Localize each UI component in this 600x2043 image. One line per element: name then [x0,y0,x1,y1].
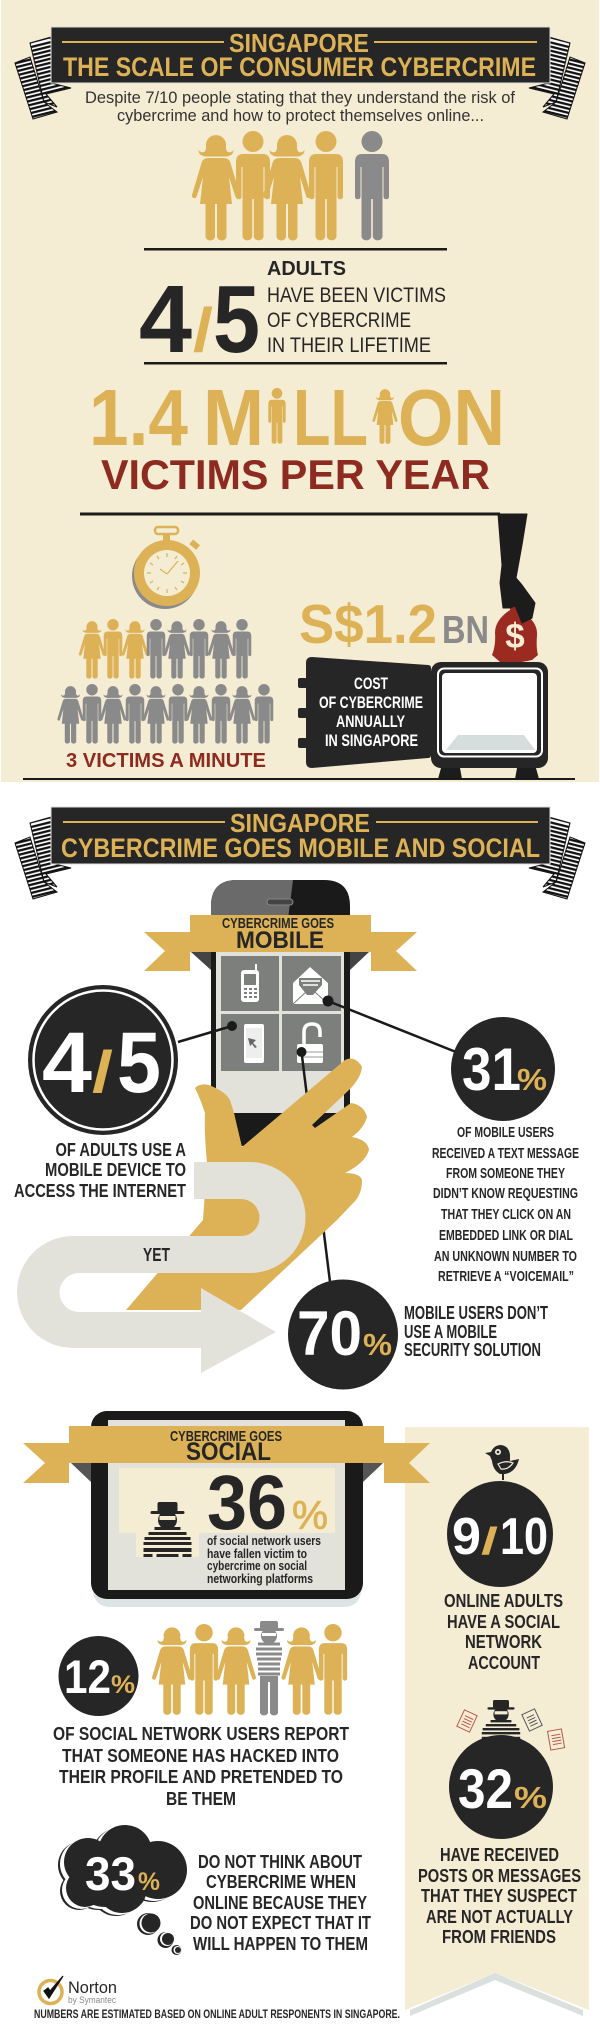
stat circle: 31% [451,1017,555,1121]
stat circle: 70% [288,1280,398,1390]
icon: man as letter I [268,388,286,444]
icon: open safe: ANNUALLY [336,713,405,731]
text: mobile users no security: USE A MOBILE [404,1322,497,1342]
illustration: smartphone [211,880,350,1146]
stat: 4/5 adults victims [139,258,446,373]
stat circle: 9/10: 9 [452,1508,481,1566]
banner: Singapore cybercrime goes mobile and social [15,807,585,899]
icon: open safe: OF CYBERCRIME [319,694,423,712]
stat circle: 32% [449,1735,553,1839]
ribbon: cybercrime goes mobile: CYBERCRIME GOES [222,915,334,932]
text: do not think about cybercrime [190,1852,371,1954]
footnote: NUMBERS ARE ESTIMATED BASED ON ONLINE ADULT RESPONENTS IN SINGAPORE. [34,2009,400,2021]
text: do not think about cybercrime: CYBERCRIME WHEN [206,1872,356,1892]
icon: money bag [492,596,538,663]
ribbon: cybercrime goes mobile: MOBILE [236,927,324,954]
stat circle: 32%: 32 [458,1757,513,1820]
icon: open padlock [297,1024,323,1063]
icon: touch tablet [244,1024,264,1063]
illustration: tablet with 36% stat [91,1411,363,1607]
stat: 4/5 adults victims: / [193,296,213,364]
ribbon: cybercrime goes social: CYBERCRIME GOES [170,1428,282,1445]
text: hacked profiles: OF SOCIAL NETWORK USERS REPORT [53,1724,349,1744]
text: adults use mobile device: MOBILE DEVICE TO [45,1160,186,1180]
panel: cybercrime goes mobile and social [14,807,589,2021]
text: adults use mobile device: ACCESS THE INTERNET [14,1181,186,1201]
stat circle: 9/10: / [481,1521,499,1563]
stat circle: 4/5: 4 [42,1015,92,1111]
text: mobile users text message [432,1125,579,1285]
stat: 4/5 adults victims: 5 [213,266,260,373]
text: adults use mobile device: OF ADULTS USE A [56,1140,186,1160]
people rows: 3 victims a minute [57,619,273,744]
arrow: yet: YET [143,1245,170,1265]
text: mobile users no security: SECURITY SOLUTION [404,1340,541,1360]
illustration: tablet with 36% stat: cybercrime on social [207,1558,307,1573]
illustration: tablet with 36% stat: have fallen victim to [207,1546,307,1561]
logo: Norton by Symantec [39,1976,117,2005]
stat: 4/5 adults victims: IN THEIR LIFETIME [267,334,431,357]
icon: arm reaching from above [498,514,535,623]
banner: Singapore cybercrime goes mobile and social: SINGAPORE [230,808,370,838]
illustration: tablet with 36% stat: of social network users [207,1533,321,1548]
icon: woman as letter I [372,389,398,444]
panel: scale of consumer cybercrime [1,0,599,782]
stat: 4/5 adults victims: 4 [139,266,192,373]
text: do not think about cybercrime: DO NOT EXPECT THAT IT [190,1913,371,1933]
stat circle: 12%: % [111,1671,135,1699]
stat: S$1.2BN: S$1.2 [299,593,437,655]
text: adults use mobile device [14,1140,186,1201]
icon: bird [485,1445,519,1480]
stat: S$1.2BN: BN [442,609,489,652]
stat circle: 31%: % [517,1062,547,1097]
arrow: yet [17,1162,306,1373]
people: group with impostor [152,1621,347,1715]
text: do not think about cybercrime: WILL HAPPEN TO THEM [193,1934,368,1954]
intro text: cybercrime and how to protect themselves online... [117,107,484,125]
logo: Norton by Symantec: by Symantec [68,1995,116,2005]
stat circle: 70%: 70 [297,1299,362,1369]
banner: Singapore cybercrime goes mobile and social: CYBERCRIME GOES MOBILE AND SOCIAL [61,833,540,863]
text: mobile users no security [404,1303,548,1360]
text: do not think about cybercrime: DO NOT THINK ABOUT [198,1852,362,1872]
illustration: hand holding phone [126,1059,369,1310]
thought cloud: 33% [58,1825,187,1955]
intro text: Despite 7/10 people stating that they understand the risk of [85,89,515,107]
text: online adults: HAVE A SOCIAL [447,1611,560,1632]
text: suspect posts: HAVE RECEIVED [440,1844,559,1865]
text: hacked profiles: THAT SOMEONE HAS HACKED INTO [62,1746,339,1766]
icon: stopwatch [132,527,200,609]
text: mobile users no security: MOBILE USERS DON’T [404,1303,548,1323]
banner: Singapore scale of consumer cybercrime: SINGAPORE [229,28,369,58]
banner: Singapore scale of consumer cybercrime: THE SCALE OF CONSUMER CYBERCRIME [63,52,536,82]
icon: open safe [298,657,548,779]
headline: 1.4 million: ON [398,373,505,462]
text: mobile users text message: OF MOBILE USERS [457,1125,554,1141]
text: suspect posts [418,1844,581,1947]
text: do not think about cybercrime: ONLINE BECAUSE THEY [193,1893,367,1913]
stat circle: 9/10: 10 [500,1508,548,1566]
stat: 4/5 adults victims: HAVE BEEN VICTIMS [267,284,446,307]
stat circle: 70%: % [363,1327,392,1362]
connector lines [178,996,456,1282]
illustration: tablet with 36% stat: % [292,1494,328,1538]
headline: 1.4 million: 1.4 [89,373,188,462]
icon: thief [144,1502,192,1557]
illustration: tablet with 36% stat: 36 [207,1460,287,1546]
intro text [85,89,515,125]
headline: victims per year: VICTIMS PER YEAR [101,451,490,498]
icon: grey impostor figure [254,1621,284,1715]
panel: social network sidebar [405,1427,589,2016]
stat circle: 12%: 12 [64,1650,111,1703]
thought cloud: 33%: % [138,1868,160,1896]
icon: money bag: $ [505,617,525,656]
stat: 4/5 adults victims: OF CYBERCRIME [267,309,411,332]
thought cloud: 33%: 33 [85,1847,136,1900]
text: online adults: ACCOUNT [468,1652,541,1673]
logo: Norton by Symantec: Norton [68,1978,117,1997]
text: online adults [444,1590,563,1673]
illustration: tablet with 36% stat: networking platforms [207,1571,313,1586]
text: hacked profiles: BE THEM [166,1789,236,1809]
people: four of five adults [192,131,389,240]
stat: 4/5 adults victims: ADULTS [267,258,346,280]
icon: open safe: COST [354,675,388,693]
icon: open safe: IN SINGAPORE [325,732,418,750]
text: online adults: ONLINE ADULTS [444,1590,563,1611]
stat circle: 4/5 [28,985,178,1135]
stat circle: 31%: 31 [462,1036,521,1103]
ribbon: cybercrime goes mobile [144,915,417,971]
headline: 1.4 million: M [203,373,264,462]
label: 3 victims a minute: 3 VICTIMS A MINUTE [66,750,266,772]
headline: 1.4 million [89,373,505,462]
icon: envelope [293,967,328,1004]
icon: thief with stolen papers [457,1700,565,1750]
stat circle: 9/10 [447,1481,553,1587]
banner: Singapore scale of consumer cybercrime [15,27,585,119]
stat circle: 32%: % [514,1780,547,1815]
text: suspect posts: FROM FRIENDS [442,1926,556,1947]
ribbon: cybercrime goes social: SOCIAL [186,1438,271,1466]
headline: 1.4 million: LL [293,373,368,462]
text: hacked profiles [53,1724,349,1809]
icon: mobile phone [241,964,259,1002]
stat circle: 4/5: / [92,1040,113,1105]
stat circle: 4/5: 5 [117,1015,161,1111]
ribbon: cybercrime goes social [23,1426,430,1483]
stat circle: 12% [58,1636,138,1716]
text: hacked profiles: THEIR PROFILE AND PRETENDED TO [59,1767,343,1787]
text: online adults: NETWORK [465,1631,543,1652]
